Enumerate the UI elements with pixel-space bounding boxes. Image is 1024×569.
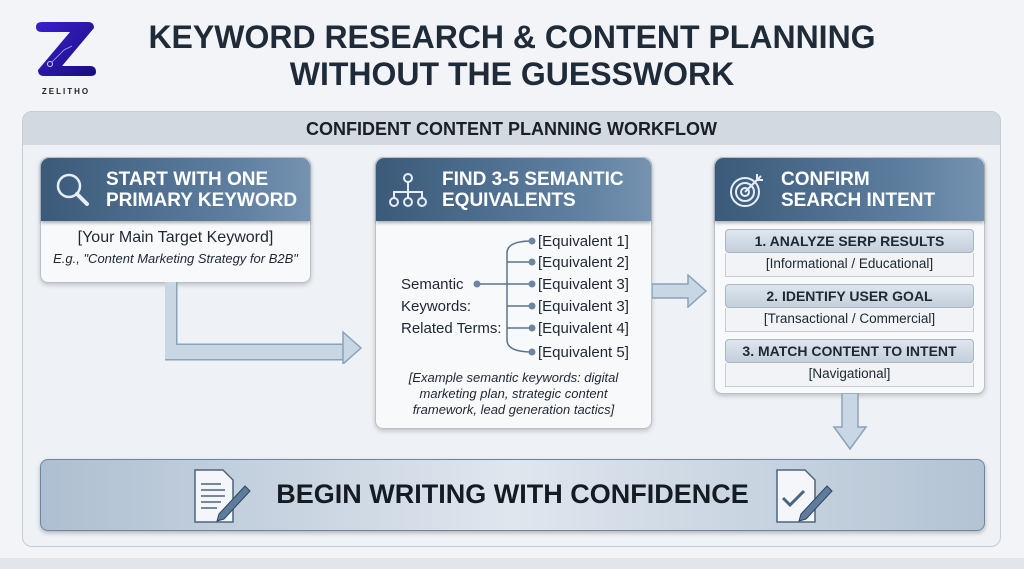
semantic tree: [Equivalent 3] (538, 298, 629, 315)
card: search intent (714, 157, 985, 394)
semantic tree: Related Terms: (401, 320, 502, 337)
icon: document pen (194, 469, 251, 523)
example note: [Example semantic keywords: digital (409, 370, 618, 385)
arrow: card1 to card2 (165, 282, 362, 364)
semantic tree: Semantic (401, 276, 464, 293)
card body (53, 229, 298, 266)
arrow: down to final (832, 393, 868, 450)
semantic tree: [Equivalent 3] (538, 276, 629, 293)
step 3 (725, 339, 974, 363)
card header: CONFIRM (781, 169, 870, 190)
semantic tree: [Equivalent 4] (538, 320, 629, 337)
bottom strip (0, 558, 1024, 569)
card header: SEARCH INTENT (781, 190, 935, 211)
card header: START WITH ONE (106, 169, 268, 190)
arrow: card2 to card3 (652, 274, 707, 308)
step 2: 2. IDENTIFY USER GOAL (766, 288, 933, 304)
title: KEYWORD RESEARCH & CONTENT PLANNING (148, 19, 876, 55)
step 3: 3. MATCH CONTENT TO INTENT (742, 343, 957, 359)
semantic tree: Keywords: (401, 298, 471, 315)
card: semantic equivalents (375, 157, 652, 429)
semantic tree (401, 233, 629, 361)
card header (41, 158, 310, 221)
card header: PRIMARY KEYWORD (106, 190, 297, 211)
card header: EQUIVALENTS (442, 190, 576, 211)
logo: ZELITHO (42, 87, 90, 96)
panel: workflow (22, 111, 1001, 547)
card: primary keyword (40, 157, 311, 283)
card: search intent: [Informational / Educational] (766, 256, 933, 271)
card body: [Your Main Target Keyword] (78, 229, 273, 246)
card body: E.g., "Content Marketing Strategy for B2B" (53, 251, 298, 266)
card header (715, 158, 984, 221)
semantic tree: [Equivalent 1] (538, 233, 629, 250)
logo (36, 22, 96, 96)
final text: BEGIN WRITING WITH CONFIDENCE (276, 479, 749, 509)
example note (408, 370, 619, 417)
final bar (40, 459, 985, 531)
semantic tree: [Equivalent 2] (538, 254, 629, 271)
panel heading: CONFIDENT CONTENT PLANNING WORKFLOW (306, 119, 717, 139)
example note: framework, lead generation tactics] (413, 402, 614, 417)
panel heading (23, 112, 1000, 145)
title (148, 19, 876, 92)
icon: checked document (776, 469, 833, 523)
title: WITHOUT THE GUESSWORK (290, 56, 734, 92)
example note: marketing plan, strategic content (420, 386, 607, 401)
step 2 (725, 284, 974, 308)
semantic tree: [Equivalent 5] (538, 344, 629, 361)
step 1 (725, 229, 974, 253)
card: search intent: [Transactional / Commercial] (764, 311, 935, 326)
step 1: 1. ANALYZE SERP RESULTS (755, 233, 944, 249)
card header: FIND 3-5 SEMANTIC (442, 169, 624, 190)
card header (376, 158, 651, 221)
card: search intent: [Navigational] (809, 366, 890, 381)
